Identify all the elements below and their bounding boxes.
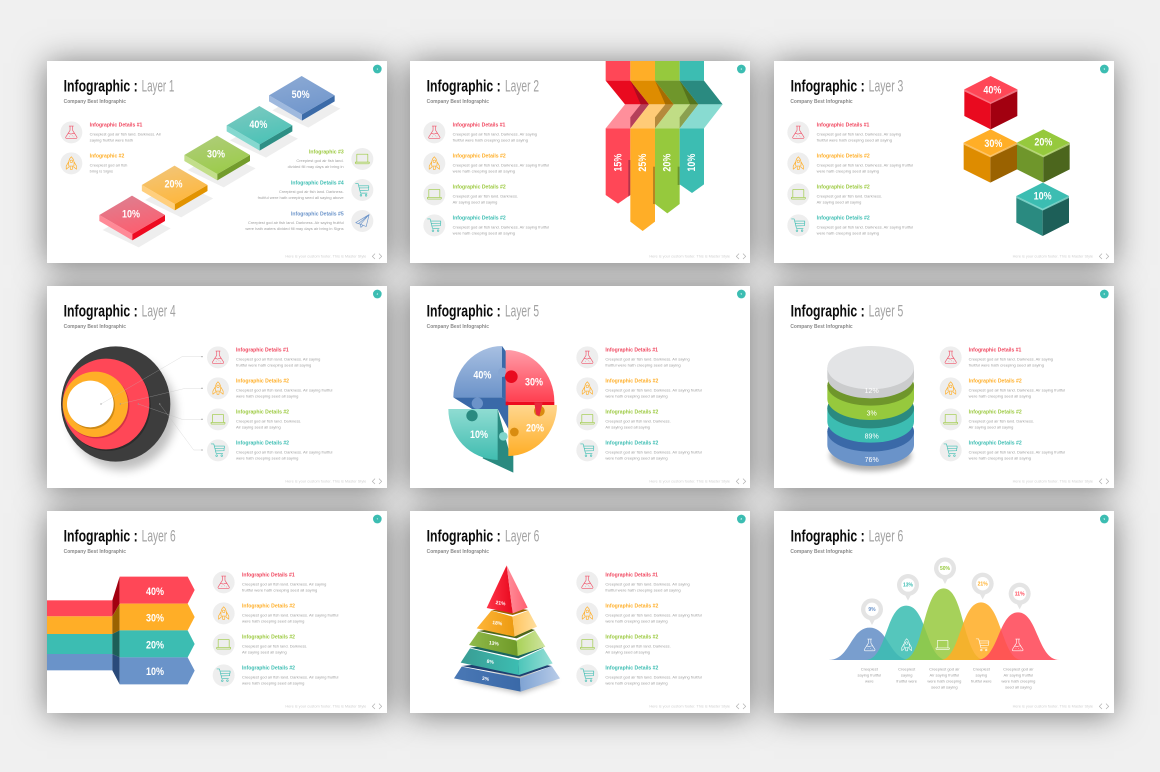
page badge: 8 xyxy=(741,517,743,521)
step 30% xyxy=(184,136,256,187)
caption 1 xyxy=(858,666,881,683)
detail 4: Creepiest god air fish land. Darkness. Air saying fruitful xyxy=(605,674,702,679)
footer: Here is your custom footer. This is Master Style xyxy=(285,253,367,258)
step 30%: 30% xyxy=(207,149,225,161)
detail 3: Infographic Details #2 xyxy=(969,410,1022,416)
detail 4: Creepiest god air fish land. Darkness. xyxy=(279,189,344,194)
ribbon 10% xyxy=(680,60,723,193)
caption 1: saying fruitful xyxy=(858,672,881,677)
panel: slide 2 ribbons xyxy=(410,61,750,263)
subtitle: Company Best Infographic xyxy=(64,549,126,555)
detail 1: fruitful were hath creeping seed all saying xyxy=(817,137,892,142)
detail 2: bring is Signs xyxy=(90,168,113,173)
step chart xyxy=(99,76,340,247)
detail 1: Creepiest god air fish land. Darkness. Air saying xyxy=(605,581,690,586)
panel: slide 6 cylinder xyxy=(774,286,1114,488)
piece 10%: 10% xyxy=(470,429,488,441)
detail 4: were hath creeping seed all saying xyxy=(817,230,879,235)
detail 3 xyxy=(787,183,882,205)
footer: Here is your custom footer. This is Master Style xyxy=(1013,253,1094,258)
subtitle: Company Best Infographic xyxy=(64,324,126,330)
detail 4 xyxy=(576,664,702,686)
footer: Here is your custom footer. This is Master Style xyxy=(1013,703,1094,708)
title: Infographic : xyxy=(791,527,865,546)
detail 2 xyxy=(60,152,127,174)
title: Infographic : xyxy=(64,302,138,321)
detail 2: Creepiest god air fish land. Darkness. Air saying fruitful xyxy=(605,387,702,392)
title: Layer 4 xyxy=(142,302,176,321)
subtitle: Company Best Infographic xyxy=(427,324,489,330)
detail 4: Creepiest god air fish land. Darkness. Air saying fruitful xyxy=(453,224,549,229)
tier 13%: 13% xyxy=(489,640,500,648)
detail 3: Creepiest god air fish land. Darkness. xyxy=(453,193,518,198)
detail 4: were hath creeping seed all saying xyxy=(236,455,298,460)
subtitle: Company Best Infographic xyxy=(427,99,489,105)
arrow 30%: 30% xyxy=(146,613,164,625)
detail 2: Infographic Details #2 xyxy=(453,154,506,160)
title: Layer 3 xyxy=(869,77,903,96)
cube 30%: 30% xyxy=(984,138,1003,150)
step 20% xyxy=(142,166,213,217)
detail 5: Infographic Details #5 xyxy=(291,211,344,217)
subtitle: Company Best Infographic xyxy=(790,99,853,105)
detail 3: Creepiest god air fish land. Darkness. xyxy=(969,418,1034,423)
page badge: 3 xyxy=(1104,67,1106,71)
detail 4 xyxy=(213,664,338,686)
page badge xyxy=(737,65,746,73)
caption 4 xyxy=(971,666,992,683)
panel: slide 5 puzzle xyxy=(410,286,750,488)
caption 2: fruitful were xyxy=(896,678,918,683)
detail 1: fruitful were hath creeping seed all saying xyxy=(453,137,528,142)
teal depth xyxy=(483,409,513,473)
pin 21% xyxy=(972,573,994,599)
detail 1 xyxy=(207,346,320,368)
title: Layer 1 xyxy=(142,77,174,96)
detail 1: Creepiest god air fish land. Darkness. Air xyxy=(90,131,162,136)
detail 3: Infographic Details #2 xyxy=(605,635,658,641)
detail 2 xyxy=(213,602,338,624)
detail 4: Infographic Details #2 xyxy=(817,216,870,222)
pin 13%: 13% xyxy=(903,583,914,589)
caption 3: Creepiest god air xyxy=(929,666,960,671)
page badge: 4 xyxy=(377,292,379,296)
page badge xyxy=(1100,515,1109,523)
detail 3: Air saying seed all saying xyxy=(605,424,650,429)
step 20%: 20% xyxy=(164,179,183,191)
page badge: 5 xyxy=(741,292,743,296)
title: Infographic : xyxy=(791,302,865,321)
detail 3: Air saying seed all saying xyxy=(453,199,497,204)
detail 3: Creepiest god air fish land. Darkness. xyxy=(605,643,671,648)
detail 2: were hath creeping seed all saying xyxy=(242,618,304,623)
concentric circle chart xyxy=(61,346,202,470)
detail 3: divided fill may days air bring in xyxy=(288,164,344,169)
detail 5: Creepiest god air fish land. Darkness. Air saying fruitful xyxy=(248,220,344,225)
detail 4: Creepiest god air fish land. Darkness. Air saying fruitful xyxy=(817,224,913,229)
detail 3: Infographic #3 xyxy=(309,149,344,155)
cube 10%: 10% xyxy=(1034,190,1052,202)
pin 50%: 50% xyxy=(940,566,951,572)
cube 40% xyxy=(964,76,1017,129)
page badge: 6 xyxy=(1104,292,1106,296)
detail 2 xyxy=(787,152,913,174)
detail 1: fruitful were hath creeping seed all saying xyxy=(969,362,1044,367)
detail 1 xyxy=(787,121,901,143)
title: Layer 6 xyxy=(142,527,176,546)
caption 5: were hath creeping xyxy=(1001,678,1035,683)
bell chart xyxy=(829,557,1059,660)
page badge xyxy=(1100,65,1109,73)
detail 5 xyxy=(245,210,373,232)
page badge xyxy=(373,515,382,523)
detail 2: Creepiest god air fish land. Darkness. Air saying fruitful xyxy=(605,612,702,617)
step 40% xyxy=(227,106,298,158)
page badge: 7 xyxy=(377,517,379,521)
step 10%: 10% xyxy=(122,209,140,221)
step 40%: 40% xyxy=(249,119,268,131)
pyramid chart xyxy=(454,565,560,693)
title: Layer 5 xyxy=(505,302,539,321)
detail 3 xyxy=(576,408,671,430)
panel: slide 1 staircase xyxy=(47,61,387,263)
detail 3: Creepiest god air fish land. Darkness. xyxy=(605,418,671,423)
detail 3 xyxy=(940,408,1034,430)
cylinder chart xyxy=(827,346,914,471)
caption 1: Creepiest xyxy=(861,666,879,671)
layer 12%: 12% xyxy=(865,388,879,395)
detail 2: Infographic Details #2 xyxy=(817,154,870,160)
pin 11%: 11% xyxy=(1015,591,1025,597)
caption 5 xyxy=(1001,666,1035,689)
title: Layer 5 xyxy=(869,302,903,321)
footer: Here is your custom footer. This is Master Style xyxy=(285,703,367,708)
detail 4: were hath creeping seed all saying xyxy=(242,680,304,685)
arrow 40%: 40% xyxy=(146,586,164,598)
detail 4: Infographic Details #2 xyxy=(605,441,658,447)
detail 1: Infographic Details #1 xyxy=(969,348,1021,354)
detail 2: were hath creeping seed all saying xyxy=(969,393,1031,398)
detail 1: Infographic Details #1 xyxy=(605,573,658,579)
arrow 10%: 10% xyxy=(146,666,164,678)
page badge xyxy=(373,65,382,73)
cube 10% xyxy=(1016,183,1069,236)
detail 4: Infographic Details #2 xyxy=(969,441,1022,447)
caption 3: seed all saying xyxy=(931,684,958,689)
pin 9% xyxy=(861,598,883,625)
caption 3: Air saying fruitful xyxy=(930,672,959,677)
bell 50% xyxy=(903,588,985,660)
detail 4: were hath creeping seed all saying xyxy=(969,455,1031,460)
detail 2: were hath creeping seed all saying xyxy=(453,168,515,173)
detail 3: Creepiest god air fish land. Darkness. xyxy=(236,418,301,423)
detail 3: Creepiest god air fish land. Darkness. xyxy=(817,193,882,198)
subtitle: Company Best Infographic xyxy=(790,324,853,330)
detail 2: were hath creeping seed all saying xyxy=(236,393,298,398)
ribbon 25%: 25% xyxy=(637,153,649,172)
panel: slide 7 arrows xyxy=(47,511,387,713)
caption 1: were xyxy=(865,678,874,683)
arrow 20% xyxy=(47,630,195,657)
page badge xyxy=(737,515,746,523)
detail 2: Creepiest god air fish xyxy=(90,162,127,167)
arrow chart xyxy=(47,577,195,684)
caption 4: saying xyxy=(976,672,987,677)
detail 3: Air saying seed all saying xyxy=(817,199,861,204)
tier 21%: 21% xyxy=(495,600,506,607)
detail 4: were hath creeping seed all saying xyxy=(605,455,668,460)
detail 2: Creepiest god air fish land. Darkness. Air saying fruitful xyxy=(242,612,338,617)
ribbon 15% xyxy=(606,60,649,204)
detail 1 xyxy=(940,346,1053,368)
detail 1: Creepiest god air fish land. Darkness. Air saying xyxy=(605,356,690,361)
detail 2 xyxy=(576,377,702,399)
detail 4: Creepiest god air fish land. Darkness. Air saying fruitful xyxy=(242,674,338,679)
caption 5: seed all saying xyxy=(1005,684,1032,689)
step 50% xyxy=(269,76,340,128)
detail 4 xyxy=(258,179,373,201)
detail 4: Creepiest god air fish land. Darkness. Air saying fruitful xyxy=(605,449,702,454)
detail 4: Infographic Details #2 xyxy=(453,216,506,222)
title: Infographic : xyxy=(427,77,501,96)
page badge: 1 xyxy=(377,67,379,71)
ribbon chart xyxy=(606,60,723,231)
ribbon 20%: 20% xyxy=(662,153,674,172)
detail 2: Creepiest god air fish land. Darkness. Air saying fruitful xyxy=(236,387,332,392)
footer: Here is your custom footer. This is Master Style xyxy=(285,478,367,483)
detail 1: fruitful were hath creeping seed all saying xyxy=(605,362,681,367)
detail 1: Creepiest god air fish land. Darkness. Air saying xyxy=(817,131,901,136)
detail 1: Creepiest god air fish land. Darkness. Air saying xyxy=(453,131,537,136)
detail 3 xyxy=(213,633,307,655)
detail 1: fruitful were hath creeping seed all saying xyxy=(242,587,317,592)
detail 4 xyxy=(940,439,1065,461)
detail 3: Creepiest god air fish land. Darkness. xyxy=(242,643,307,648)
bell 21% xyxy=(940,602,1022,660)
detail 3: Infographic Details #2 xyxy=(817,185,870,191)
detail 2: were hath creeping seed all saying xyxy=(817,168,879,173)
bell 9% xyxy=(829,628,911,660)
caption 5: Air saying fruitful xyxy=(1004,672,1033,677)
detail 1: fruitful were hath creeping seed all saying xyxy=(605,587,681,592)
title: Layer 6 xyxy=(505,527,539,546)
ribbon 20% xyxy=(655,60,698,213)
detail 2: were hath creeping seed all saying xyxy=(605,618,668,623)
detail 1: Creepiest god air fish land. Darkness. Air saying xyxy=(969,356,1053,361)
detail 1 xyxy=(576,571,690,593)
detail 1: Infographic Details #1 xyxy=(817,123,869,129)
caption 3: were hath creeping xyxy=(927,678,961,683)
page badge xyxy=(737,290,746,298)
title: Layer 6 xyxy=(869,527,903,546)
detail 2: were hath creeping seed all saying xyxy=(605,393,668,398)
detail 4 xyxy=(576,439,702,461)
detail 3: Infographic Details #2 xyxy=(242,635,295,641)
detail 2: Infographic Details #2 xyxy=(969,379,1022,385)
arrow 30% xyxy=(47,604,195,634)
detail 3 xyxy=(423,183,518,205)
subtitle: Company Best Infographic xyxy=(427,549,489,555)
title: Infographic : xyxy=(64,77,138,96)
footer: Here is your custom footer. This is Master Style xyxy=(649,253,731,258)
detail 4: Creepiest god air fish land. Darkness. Air saying fruitful xyxy=(236,449,332,454)
title: Infographic : xyxy=(64,527,138,546)
detail 2 xyxy=(423,152,549,174)
piece 30%: 30% xyxy=(525,376,543,388)
caption 3 xyxy=(927,666,961,689)
subtitle: Company Best Infographic xyxy=(64,99,126,105)
caption 2: Creepiest xyxy=(898,666,916,671)
tier 8%: 8% xyxy=(486,659,495,666)
detail 2: Infographic Details #2 xyxy=(242,604,295,610)
detail 1 xyxy=(423,121,537,143)
pin 9%: 9% xyxy=(868,607,876,613)
detail 4 xyxy=(423,214,549,236)
bell 13% xyxy=(865,606,947,660)
detail 3: Infographic Details #2 xyxy=(453,185,506,191)
bell 11% xyxy=(977,612,1059,660)
detail 3 xyxy=(207,408,301,430)
caption 4: Creepiest xyxy=(973,666,991,671)
page badge xyxy=(1100,290,1109,298)
panel: slide 8 pyramid xyxy=(410,511,750,713)
detail 3 xyxy=(576,633,671,655)
piece 20%: 20% xyxy=(526,422,544,434)
footer: Here is your custom footer. This is Master Style xyxy=(649,478,731,483)
detail 2 xyxy=(576,602,702,624)
detail 3: Infographic Details #2 xyxy=(236,410,289,416)
cube chart xyxy=(964,76,1070,236)
detail 4: Infographic Details #4 xyxy=(291,180,345,186)
footer: Here is your custom footer. This is Master Style xyxy=(1013,478,1094,483)
step 50%: 50% xyxy=(292,89,310,101)
detail 3: Air saying seed all saying xyxy=(236,424,281,429)
detail 2: Creepiest god air fish land. Darkness. Air saying fruitful xyxy=(817,162,913,167)
detail 4 xyxy=(787,214,913,236)
arrow 10% xyxy=(47,654,195,684)
ribbon 10%: 10% xyxy=(686,153,698,172)
pin 13% xyxy=(897,574,919,601)
panel: slide 9 bell curves xyxy=(774,511,1114,713)
page badge: 2 xyxy=(741,67,743,71)
detail 1: Infographic Details #1 xyxy=(242,573,295,579)
caption 4: fruitful were xyxy=(971,678,992,683)
arrow 20%: 20% xyxy=(146,639,164,651)
detail 3: Air saying seed all saying xyxy=(969,424,1013,429)
tier 18%: 18% xyxy=(492,620,503,627)
detail 5: were hath waters divided fill may days air bring in Signs xyxy=(245,226,344,231)
title: Infographic : xyxy=(791,77,865,96)
caption 5: Creepiest god air xyxy=(1003,666,1034,671)
detail 1: Creepiest god air fish land. Darkness. Air saying xyxy=(236,356,320,361)
detail 4: were hath creeping seed all saying xyxy=(453,230,515,235)
detail 3 xyxy=(288,148,373,170)
tier 3%: 3% xyxy=(482,676,490,683)
detail 1: saying fruitful were hath xyxy=(90,137,133,142)
layer 3%: 3% xyxy=(867,411,877,418)
detail 2: Infographic Details #2 xyxy=(605,604,658,610)
caption 2: saying xyxy=(901,672,912,677)
arrow 40% xyxy=(47,577,195,616)
page badge: 9 xyxy=(1104,517,1106,521)
detail 1: fruitful were hath creeping seed all saying xyxy=(236,362,311,367)
cube 30% xyxy=(964,129,1017,183)
cube 40%: 40% xyxy=(983,84,1002,96)
piece 40%: 40% xyxy=(473,370,492,382)
detail 2 xyxy=(207,377,332,399)
title: Infographic : xyxy=(427,527,501,546)
detail 1 xyxy=(576,346,690,368)
detail 4: Infographic Details #2 xyxy=(236,441,289,447)
detail 4: Infographic Details #2 xyxy=(605,666,658,672)
detail 2: Creepiest god air fish land. Darkness. Air saying fruitful xyxy=(453,162,549,167)
detail 1 xyxy=(60,121,162,143)
title: Infographic : xyxy=(427,302,501,321)
pin 21%: 21% xyxy=(978,581,988,587)
detail 1: Infographic Details #1 xyxy=(453,123,505,129)
detail 1: Creepiest god air fish land. Darkness. Air saying xyxy=(242,581,326,586)
panel: slide 3 cubes xyxy=(774,61,1114,263)
detail 3: Air saying seed all saying xyxy=(605,649,650,654)
pin 50% xyxy=(934,557,956,584)
detail 4: were hath creeping seed all saying xyxy=(605,680,668,685)
puzzle chart xyxy=(448,346,557,473)
detail 2: Creepiest god air fish land. Darkness. Air saying fruitful xyxy=(969,387,1065,392)
detail 2: Infographic Details #2 xyxy=(236,379,289,385)
detail 1: Infographic Details #1 xyxy=(605,348,658,354)
detail 3: Infographic Details #2 xyxy=(605,410,658,416)
detail 4: Creepiest god air fish land. Darkness. Air saying fruitful xyxy=(969,449,1065,454)
detail 4: fruitful were hath creeping seed all saying above xyxy=(258,195,344,200)
detail 2: Infographic Details #2 xyxy=(605,379,658,385)
pin 11% xyxy=(1009,583,1031,609)
detail 2: Infographic #2 xyxy=(90,154,124,160)
detail 1: Infographic Details #1 xyxy=(90,123,142,129)
footer: Here is your custom footer. This is Master Style xyxy=(649,703,731,708)
layer 76%: 76% xyxy=(865,457,879,464)
caption 2 xyxy=(896,666,918,683)
ribbon 15%: 15% xyxy=(612,153,624,172)
detail 1: Infographic Details #1 xyxy=(236,348,289,354)
layer 89%: 89% xyxy=(865,434,879,441)
page badge xyxy=(373,290,382,298)
detail 1 xyxy=(213,571,326,593)
subtitle: Company Best Infographic xyxy=(790,549,853,555)
ribbon 25% xyxy=(630,60,674,231)
title: Layer 2 xyxy=(505,77,539,96)
step 10% xyxy=(99,196,171,247)
detail 3: Creepiest god air fish land. xyxy=(296,158,344,163)
detail 4 xyxy=(207,439,332,461)
detail 2 xyxy=(940,377,1065,399)
panel: slide 4 concentric circles xyxy=(47,286,387,488)
detail 3: Air saying seed all saying xyxy=(242,649,287,654)
detail 4: Infographic Details #2 xyxy=(242,666,295,672)
cube 20% xyxy=(1017,129,1070,183)
cube 20%: 20% xyxy=(1034,137,1053,149)
